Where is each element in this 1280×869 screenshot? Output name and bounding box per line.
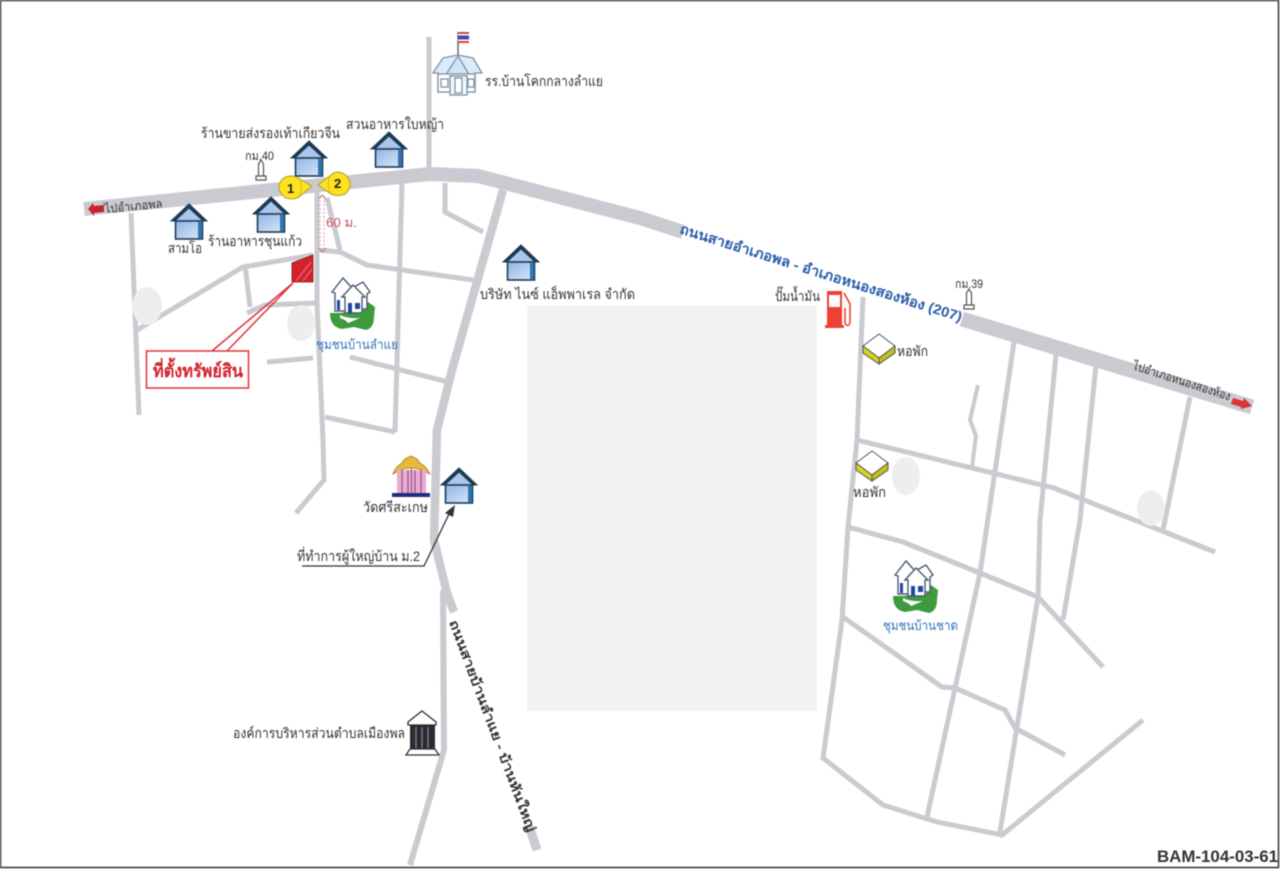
label: restaurant: สวนอาหารใบหญ้า [346, 116, 444, 132]
minor roads east [823, 297, 1215, 835]
icon: community Ban Lamyae [330, 278, 375, 330]
label: highway name: ถนนสายอำเภอพล - อำเภอหนองสองห้อง (207) [678, 221, 964, 325]
secondary road end [529, 826, 537, 850]
label: Ban Lamyae road name: ถนนสายบ้านลำแย - บ้านหันใหญ่ [445, 617, 540, 834]
km post 40: กม.40 [245, 149, 274, 163]
label: dormitory 1: หอพัก [897, 343, 928, 359]
km post 40 [245, 149, 274, 180]
reference code: BAM-104-03-61 [1157, 847, 1278, 866]
label: to Phon district: ไปอำเภอพล [103, 196, 163, 216]
icon: houses [171, 132, 539, 503]
icon: dormitory 2 [856, 451, 888, 481]
callout: village head office: ที่ทำการผู้ใหญ่บ้าน ม.2 [297, 547, 420, 565]
label: Sam O: สามโอ [168, 240, 202, 256]
icon: temple [392, 456, 430, 497]
main highway 207 east part [962, 319, 1252, 407]
arrow: east [1231, 398, 1252, 409]
minor roads west [131, 37, 483, 865]
secondary road to Ban Han Yai [434, 190, 503, 612]
distance indicator 60 m: 60 ม. [326, 215, 357, 230]
label: gas station: ปั๊มน้ำมัน [775, 286, 820, 304]
property plot [292, 255, 313, 282]
label: school: รร.บ้านโคกกลางลำแย [485, 73, 603, 89]
label: municipal building: องค์การบริหารส่วนตำบลเมืองพล [233, 725, 405, 741]
main highway 207 west part [84, 174, 683, 232]
arrow: west [88, 203, 104, 216]
label: to Nong Song Hong: ไปอำเภอหนองสองห้อง [1130, 358, 1232, 403]
callout: village head office [297, 505, 455, 566]
marker 1 [279, 176, 312, 199]
marker 1: 1 [287, 181, 294, 196]
erased label patches [132, 287, 1165, 526]
marker 2: 2 [334, 176, 341, 191]
distance indicator 60 m [319, 195, 357, 252]
label: dormitory 2: หอพัก [853, 484, 886, 500]
icon: municipal building [406, 711, 439, 755]
label: shoe shop: ร้านขายส่งรองเท้าเกียวจีน [201, 125, 340, 141]
label: community Ban Lamyae: ชุมชนบ้านลำแย [316, 337, 398, 353]
icon: community Ban Chat [893, 561, 938, 613]
label: Khun Kaew restaurant: ร้านอาหารชุนแก้ว [208, 233, 302, 250]
icon: school with flag [433, 32, 482, 95]
label: company: บริษัท ไนซ์ แอ็พพาเรล จำกัด [480, 285, 635, 302]
label: temple: วัดศรีสะเกษ [363, 499, 428, 515]
callout: property location [146, 351, 248, 388]
callout: property location: ที่ตั้งทรัพย์สิน [153, 357, 244, 381]
label: community Ban Chat: ชุมชนบ้านชาด [883, 618, 958, 634]
km post 39: กม.39 [955, 277, 983, 291]
icon: gas pump [825, 291, 850, 328]
icon: dormitory 1 [863, 334, 895, 364]
blanked rectangle [527, 306, 817, 711]
marker 2 [318, 172, 350, 196]
property pointer lines [212, 283, 293, 351]
km post 39 [955, 277, 983, 309]
